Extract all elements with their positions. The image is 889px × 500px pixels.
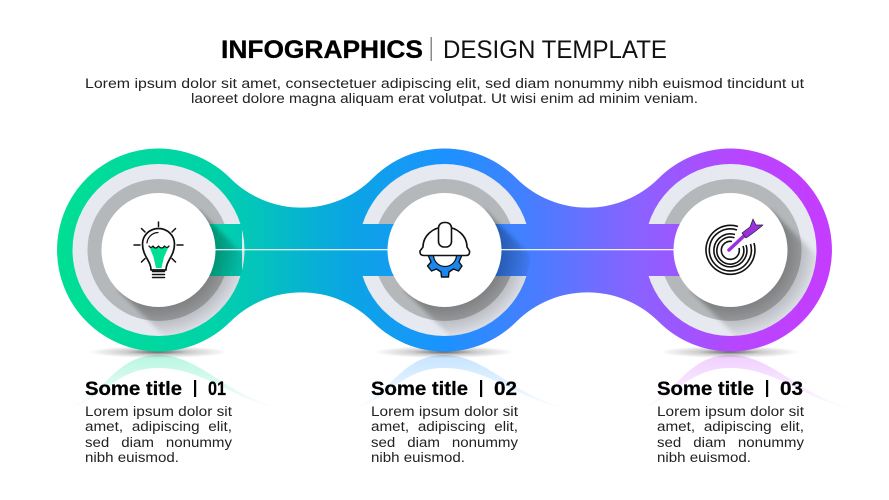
step 2 text: nibh euismod. (371, 450, 465, 465)
title: DESIGN TEMPLATE (443, 36, 667, 64)
step 2 title: 02 (494, 378, 517, 400)
step 1 text: sed diam nonummy (85, 435, 232, 450)
step 1 text: amet, adipiscing elit, (85, 419, 232, 434)
icon: light bulb (134, 222, 183, 278)
step 3 text (657, 404, 804, 465)
icon: helmet and gear (420, 222, 470, 277)
panel: step 3 rings (644, 164, 816, 336)
step 3 text: sed diam nonummy (657, 435, 804, 450)
step 1 title (85, 378, 226, 400)
intro text (85, 76, 804, 106)
step 2 title: Some title (371, 378, 468, 400)
step 1 text (85, 404, 232, 465)
step 3 text: Lorem ipsum dolor sit (657, 404, 804, 419)
step 2 title (371, 378, 517, 400)
step 3 text: nibh euismod. (657, 450, 751, 465)
intro text: Lorem ipsum dolor sit amet, consectetuer adipiscing elit, sed diam nonummy nibh euismod tincidunt ut (85, 76, 804, 91)
step 2 text: sed diam nonummy (371, 435, 518, 450)
long shadows (118, 209, 816, 336)
step 3 text: amet, adipiscing elit, (657, 419, 804, 434)
step 1 text: Lorem ipsum dolor sit (85, 404, 232, 419)
step 3 title: Some title (657, 378, 754, 400)
panel: step 1 rings (72, 164, 244, 336)
step 1 title: Some title (85, 378, 182, 400)
connector line (200, 249, 700, 250)
icon: target and arrow (706, 219, 763, 274)
title (221, 36, 667, 64)
step 1 text: nibh euismod. (85, 450, 179, 465)
step 2 text: Lorem ipsum dolor sit (371, 404, 518, 419)
step 3 title: 03 (780, 378, 803, 400)
white discs (102, 193, 788, 307)
gradient connected band (57, 148, 832, 352)
reflections under the circles (68, 355, 852, 408)
floor shadows (88, 346, 800, 358)
step 3 title (657, 378, 803, 400)
intro text: laoreet dolore magna aliquam erat volutpat. Ut wisi enim ad minim veniam. (191, 91, 698, 106)
step 2 text: amet, adipiscing elit, (371, 419, 518, 434)
panel: step 2 rings (357, 164, 532, 336)
step 2 text (371, 404, 518, 465)
step 1 title: 01 (208, 378, 226, 400)
title: INFOGRAPHICS (221, 36, 423, 64)
